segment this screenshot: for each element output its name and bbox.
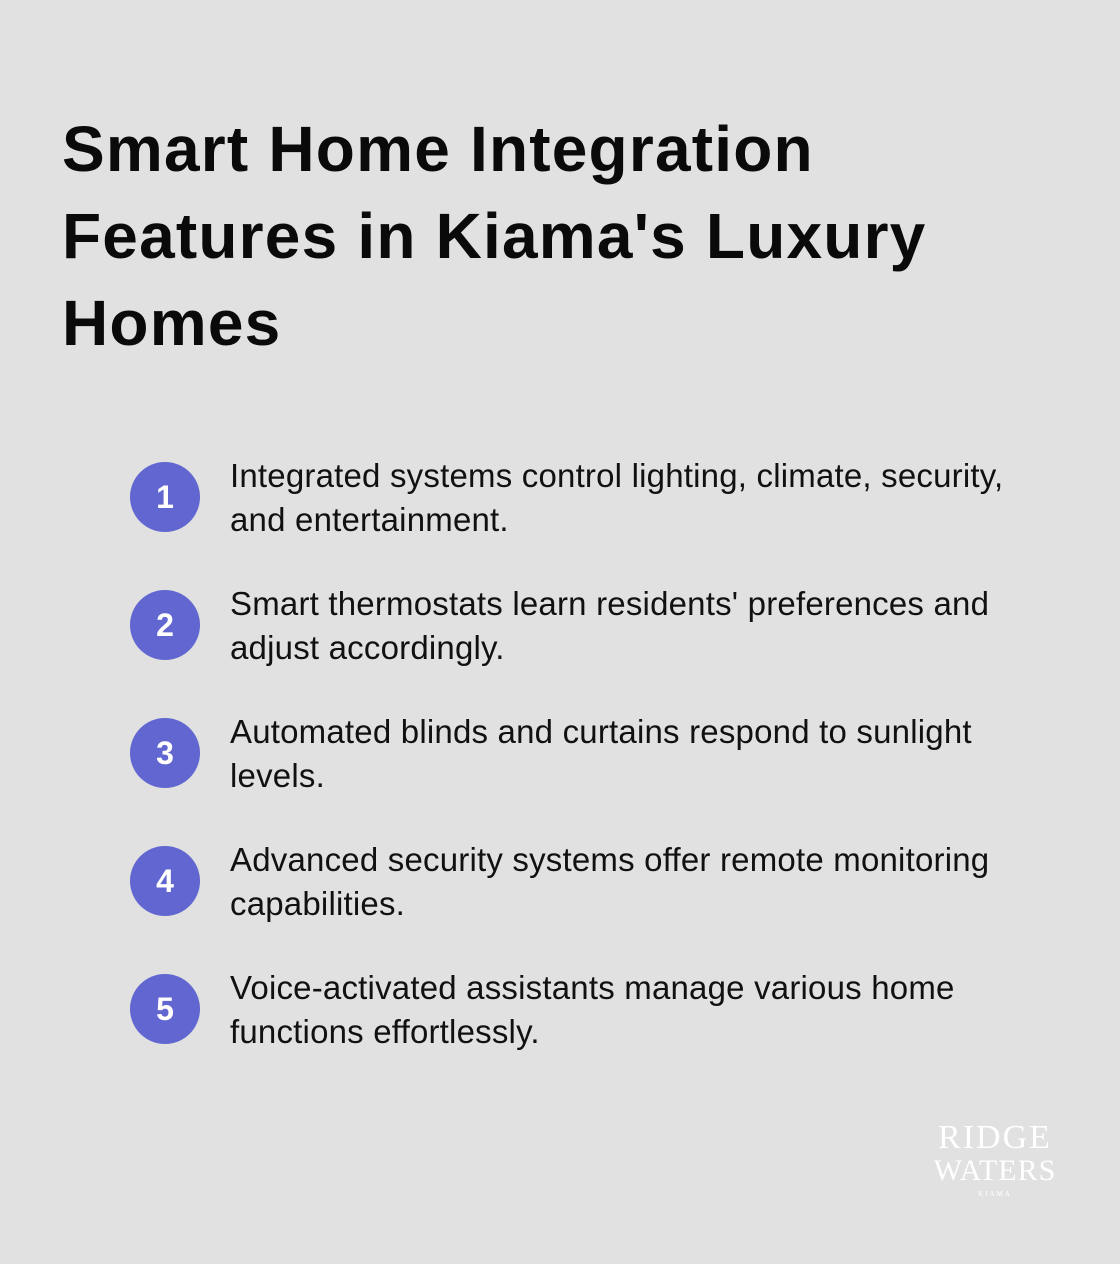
item 5: 5 (156, 991, 174, 1027)
item 3: 3 (156, 735, 174, 771)
title: Smart Home Integration (62, 113, 814, 185)
item 2: 2 (156, 607, 174, 643)
item 4: capabilities. (230, 885, 405, 922)
item 3: levels. (230, 757, 325, 794)
item 1 (130, 457, 1003, 538)
title: Features in Kiama's Luxury (62, 200, 926, 272)
item 2: Smart thermostats learn residents' preferences and (230, 585, 989, 622)
item 1: 1 (156, 479, 174, 515)
item 2 (130, 585, 989, 666)
item 3 (130, 713, 972, 794)
item 3: Automated blinds and curtains respond to sunlight (230, 713, 972, 750)
item 5 (130, 969, 955, 1050)
item 1: and entertainment. (230, 501, 509, 538)
item 4 (130, 841, 989, 922)
logo: KIAMA (978, 1190, 1012, 1198)
item 4: 4 (156, 863, 174, 899)
logo (934, 1119, 1056, 1198)
logo: WATERS (934, 1154, 1056, 1187)
title (62, 113, 926, 359)
item 1: Integrated systems control lighting, climate, security, (230, 457, 1003, 494)
item 5: functions effortlessly. (230, 1013, 540, 1050)
logo: RIDGE (938, 1119, 1052, 1156)
title: Homes (62, 287, 281, 359)
item 2: adjust accordingly. (230, 629, 505, 666)
item 4: Advanced security systems offer remote monitoring (230, 841, 989, 878)
item 5: Voice-activated assistants manage various home (230, 969, 955, 1006)
